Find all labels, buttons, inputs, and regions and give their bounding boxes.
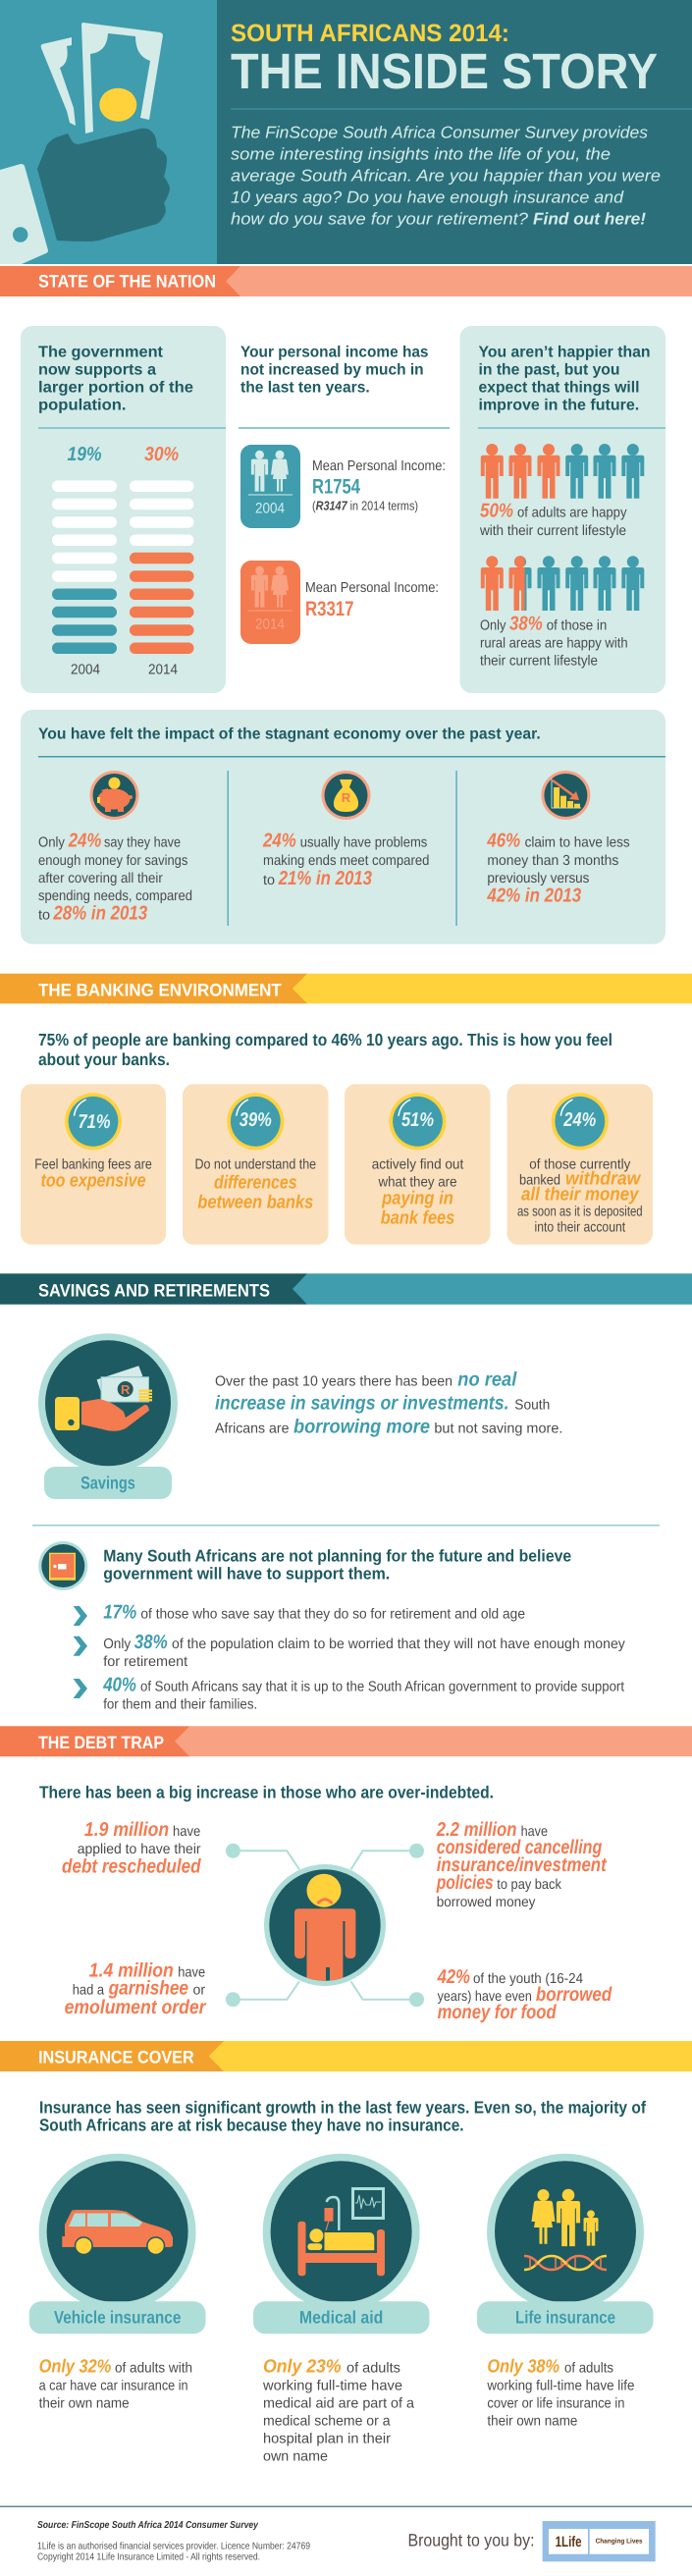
icon: open hand <box>81 1399 149 1431</box>
heading: now supports a <box>38 361 156 378</box>
icon: piggy bank <box>90 771 139 820</box>
callout: debt rescheduled: 1.9 million <box>84 1819 169 1841</box>
text: ends meet <box>262 831 430 889</box>
callout: borrowed money for food: money for food <box>438 2002 557 2023</box>
icon: safe <box>38 1541 87 1590</box>
badge 24 percent <box>552 1093 609 1150</box>
text: 50 percent: of adults are happy <box>517 506 627 521</box>
badge 24 percent: 24% <box>562 1109 596 1131</box>
card text: differences <box>214 1173 297 1194</box>
card text: Do not understand the <box>194 1156 316 1172</box>
text: less money: money than 3 months <box>487 853 618 869</box>
19 percent label: 19% <box>67 444 102 465</box>
text: ends meet: 21% in 2013 <box>278 868 372 889</box>
icon: hospital circle <box>263 2154 420 2311</box>
label: medical aid: Medical aid <box>299 2308 383 2328</box>
bar chart: 2004 <box>52 481 117 654</box>
text: life insurance stat: Only 38% <box>487 2357 559 2378</box>
savings text <box>215 1368 562 1438</box>
icon: money bag <box>322 771 371 820</box>
callout: borrowed money for food: borrowed <box>536 1984 612 2006</box>
bullet: 17 percent: 17% <box>103 1601 136 1623</box>
card text: bank fees <box>381 1208 454 1229</box>
section banner: insurance cover: INSURANCE COVER <box>38 2048 194 2067</box>
callout: garnishee: had a <box>73 1982 105 1998</box>
footer: source and legal: Copyright 2014 1Life Insurance Limited - All rights reserved. <box>37 2551 260 2562</box>
text: medical aid stat: working full-time have <box>262 2379 402 2394</box>
text: 38 percent <box>480 613 628 669</box>
text: savings: say they have <box>104 835 181 851</box>
icon: family <box>532 2189 598 2246</box>
30 percent label: 30% <box>144 444 179 465</box>
text: 38 percent: their current lifestyle <box>480 653 598 669</box>
heading <box>38 344 193 413</box>
callout: borrowed money for food: 42% <box>437 1966 470 1988</box>
callout: borrowed money for food: of the youth (16-24 <box>473 1971 583 1987</box>
callout: cancelling insurance: 2.2 million <box>436 1819 516 1841</box>
intro paragraph: some interesting insights into the life of you, the <box>231 145 611 164</box>
section banner: debt trap: THE DEBT TRAP <box>38 1733 164 1752</box>
text: life insurance stat: their own name <box>487 2414 577 2430</box>
card text: paying in <box>381 1189 453 1209</box>
text: medical aid stat: hospital plan in their <box>263 2432 391 2447</box>
income text 2004: Mean Personal Income: <box>312 458 446 474</box>
pictogram: 38 percent rural <box>481 556 644 611</box>
text: less money <box>487 831 630 907</box>
callout: debt rescheduled <box>62 1819 201 1877</box>
text: vehicle insurance stat: of adults with <box>115 2361 192 2377</box>
heading: expect that things will <box>479 379 640 396</box>
footer: 1Life logo: Changing Lives <box>596 2538 643 2546</box>
callout: cancelling insurance: considered cancelling <box>437 1837 602 1858</box>
callout: debt rescheduled: applied to have their <box>78 1842 201 1857</box>
header panel: title and intro <box>217 0 692 264</box>
icon: sad person <box>264 1864 386 1993</box>
callout: cancelling insurance: insurance/investment <box>437 1854 608 1876</box>
text: less money: previously versus <box>487 871 589 886</box>
heading: You have felt the impact of the stagnant economy over the past year. <box>38 725 541 742</box>
bullet: 40 percent <box>74 1674 624 1712</box>
footer: source and legal: 1Life is an authorised financial services provider. Licence Number: 24769 <box>37 2542 310 2552</box>
savings text: South <box>514 1397 550 1413</box>
retirement heading: Many South Africans are not planning for the future and believe <box>103 1547 571 1566</box>
bar chart: 2014 <box>130 481 194 654</box>
badge 71 percent: 71% <box>79 1111 111 1133</box>
badge 39 percent <box>227 1093 284 1150</box>
text: medical aid stat: Only 23% <box>263 2357 342 2378</box>
pictogram: 50 percent happy <box>481 444 644 499</box>
text: medical aid stat: medical scheme or a <box>263 2414 391 2430</box>
text: savings: enough money for savings <box>38 853 187 869</box>
icon: sleeve <box>55 1397 80 1430</box>
debt heading: There has been a big increase in those who are over-indebted. <box>39 1783 494 1802</box>
card text: as soon as it is deposited <box>517 1205 643 1220</box>
text: 50 percent <box>479 501 627 539</box>
card text <box>194 1156 316 1213</box>
heading: You aren’t happier than <box>479 344 650 360</box>
section banner: debt trap <box>0 1726 692 1756</box>
bullet: 38 percent: Only <box>103 1637 132 1652</box>
text: life insurance stat <box>486 2357 634 2430</box>
icon: dna helix <box>524 2256 607 2270</box>
income tile 2014 <box>240 561 300 644</box>
text: medical aid stat: medical aid are part of a <box>263 2396 415 2412</box>
card: withdraw all their money <box>507 1084 653 1245</box>
section banner: banking environment: THE BANKING ENVIRONMENT <box>38 981 282 1000</box>
savings text: no real <box>457 1368 517 1390</box>
banking heading <box>38 1030 612 1069</box>
card text: Feel banking fees are <box>34 1156 152 1172</box>
text: savings: to <box>38 908 50 924</box>
card text: all their money <box>521 1185 640 1206</box>
income tile 2004: 2004 <box>255 501 285 517</box>
text: 38 percent: rural areas are happy with <box>480 635 628 651</box>
insurance heading: South Africans are at risk because they have no insurance. <box>39 2115 464 2134</box>
bullet: 38 percent: 38% <box>134 1632 168 1653</box>
text: ends meet: making ends meet compared <box>263 853 430 869</box>
text: life insurance stat: working full-time have life <box>486 2379 634 2394</box>
heading: the last ten years. <box>240 379 370 396</box>
section banner: savings and retirements <box>0 1273 692 1305</box>
intro paragraph <box>231 124 661 229</box>
bullet: 17 percent <box>74 1601 525 1626</box>
callout: borrowed money for food: years) have even <box>438 1989 532 2005</box>
header panel: illustration <box>0 0 217 264</box>
bullet: 17 percent: of those who save say that they do so for retirement and old age <box>140 1606 525 1622</box>
text: vehicle insurance stat <box>39 2357 192 2412</box>
callout: debt rescheduled: have <box>173 1824 200 1840</box>
card text <box>517 1156 643 1236</box>
label: medical aid <box>253 2301 430 2334</box>
income text 2014 <box>305 580 439 620</box>
text: ends meet: to <box>263 873 275 888</box>
text: medical aid stat: of adults <box>346 2361 400 2377</box>
footer: source and legal: Source: FinScope South Africa 2014 Consumer Survey <box>37 2520 258 2531</box>
intro paragraph: The FinScope South Africa Consumer Survey provides <box>231 124 649 142</box>
heading: not increased by much in <box>240 361 424 378</box>
savings text: increase in savings or investments. <box>215 1392 508 1414</box>
bullet: 38 percent <box>74 1632 626 1670</box>
callout: borrowed money for food <box>437 1966 612 2023</box>
icon: fist <box>37 129 170 242</box>
text: less money: 46% <box>487 831 520 852</box>
intro paragraph: 10 years ago? Do you have enough insurance and <box>231 188 624 207</box>
income tile 2014: 2014 <box>255 617 285 633</box>
text: medical aid stat: own name <box>263 2449 328 2465</box>
callout: cancelling insurance: have <box>521 1824 548 1840</box>
callout: cancelling insurance <box>436 1819 608 1910</box>
retirement heading <box>103 1547 571 1583</box>
icon: small banknote <box>41 37 76 126</box>
card: banking fees <box>21 1084 166 1245</box>
bullet: 40 percent: of South Africans say that it is up to the South African government to provide support <box>140 1679 624 1694</box>
callout: garnishee: have <box>178 1964 205 1980</box>
label: life insurance: Life insurance <box>515 2308 615 2328</box>
text: 50 percent: with their current lifestyle <box>479 523 626 539</box>
section banner: banking environment <box>0 974 692 1003</box>
income text 2014: Mean Personal Income: <box>305 580 439 596</box>
callout: cancelling insurance: policies <box>436 1872 494 1894</box>
banking heading: about your banks. <box>38 1049 170 1069</box>
savings text: borrowing more <box>293 1417 430 1438</box>
card text: what they are <box>378 1174 457 1190</box>
icon: car circle <box>39 2154 196 2311</box>
badge 51 percent: 51% <box>401 1109 434 1131</box>
icon: large banknote <box>81 23 163 134</box>
title line one: SOUTH AFRICANS 2014: <box>231 20 509 47</box>
icon: savings circle <box>38 1333 178 1473</box>
intro paragraph: how do you save for your retirement? <box>231 210 529 229</box>
panel: government support <box>21 326 226 693</box>
section banner: insurance cover <box>0 2041 692 2071</box>
text: life insurance stat: of adults <box>564 2361 613 2377</box>
heading: in the past, but you <box>479 361 620 378</box>
text: life insurance stat: cover or life insurance in <box>487 2396 624 2412</box>
callout: garnishee: or <box>192 1982 205 1998</box>
text: savings: 24% <box>68 831 102 852</box>
section banner: state of the nation <box>0 266 692 296</box>
heading: population. <box>38 397 126 413</box>
panel: personal income <box>239 344 450 644</box>
card text: too expensive <box>41 1170 146 1191</box>
income text 2004: R1754 <box>312 476 360 499</box>
text: 38 percent: of those in <box>547 617 607 633</box>
panel: happiness <box>459 326 665 693</box>
heading <box>240 344 429 396</box>
bullet: 40 percent: 40% <box>102 1674 136 1695</box>
callout: garnishee: emolument order <box>65 1997 207 2018</box>
heading <box>479 344 650 413</box>
icon: money bag: R <box>342 790 351 805</box>
text: vehicle insurance stat: their own name <box>39 2396 130 2412</box>
retirement heading: government will have to support them. <box>103 1565 390 1583</box>
icon: heart monitor <box>353 2189 383 2219</box>
connectors <box>226 1844 424 2007</box>
callout: debt rescheduled: debt rescheduled <box>62 1855 201 1877</box>
icon: banknotes <box>96 1366 149 1402</box>
income text 2004 <box>312 458 446 512</box>
section banner: state of the nation: STATE OF THE NATION <box>38 272 216 292</box>
heading: The government <box>38 344 164 360</box>
savings text: but not saving more. <box>434 1422 562 1437</box>
text: vehicle insurance stat: Only 32% <box>39 2357 111 2378</box>
title line two: THE INSIDE STORY <box>231 43 658 99</box>
callout: cancelling insurance: to pay back <box>497 1877 562 1893</box>
card text: withdraw <box>565 1169 642 1190</box>
icon: bed and patient <box>298 2222 385 2276</box>
panel: stagnant economy <box>21 710 665 944</box>
text: 50 percent: 50% <box>480 501 513 522</box>
insurance heading <box>39 2097 646 2134</box>
card text <box>34 1156 152 1191</box>
callout: cancelling insurance: borrowed money <box>437 1895 536 1910</box>
text: savings: spending needs, compared <box>38 888 192 904</box>
footer: source and legal <box>37 2520 310 2562</box>
heading: larger portion of the <box>38 379 193 396</box>
bullet: 40 percent: for them and their families. <box>103 1696 257 1712</box>
savings text: Africans are <box>215 1422 289 1437</box>
heading: Your personal income has <box>240 344 429 360</box>
footer: 1Life logo: 1Life <box>556 2534 582 2550</box>
income text 2014: R3317 <box>305 598 353 620</box>
intro paragraph: average South African. Are you happier than you were <box>231 167 661 186</box>
heading: improve in the future. <box>479 397 639 413</box>
label: vehicle insurance <box>29 2301 206 2334</box>
icon: family circle <box>487 2154 644 2311</box>
bullet: 38 percent: for retirement <box>103 1654 187 1670</box>
card text: of those currently <box>529 1156 631 1172</box>
axis label 2004: 2004 <box>71 663 100 678</box>
label: vehicle insurance: Vehicle insurance <box>54 2308 181 2328</box>
text: 38 percent: 38% <box>509 613 543 634</box>
icon: falling chart <box>541 771 590 820</box>
icon: shirt cuff <box>0 164 48 264</box>
callout: garnishee: garnishee <box>108 1977 188 1999</box>
text: savings: 28% in 2013 <box>53 903 147 925</box>
label: life insurance <box>477 2301 654 2334</box>
text: vehicle insurance stat: a car have car insurance in <box>39 2379 188 2394</box>
income text 2004: (R3147 in 2014 terms) <box>312 498 418 512</box>
text: 38 percent: Only <box>480 617 506 633</box>
card text: banked <box>519 1173 560 1189</box>
section banner: savings and retirements: SAVINGS AND RETIREMENTS <box>38 1280 270 1300</box>
icon: coins <box>139 1390 152 1401</box>
text: medical aid stat <box>262 2357 415 2465</box>
footer: 1Life logo <box>543 2521 656 2561</box>
footer: brought to you by: Brought to you by: <box>408 2530 534 2549</box>
callout: garnishee <box>65 1959 207 2018</box>
icon: car <box>62 2210 173 2255</box>
badge 39 percent: 39% <box>240 1109 272 1131</box>
card text: between banks <box>197 1193 313 1213</box>
text: savings <box>38 831 192 925</box>
savings text: Over the past 10 years there has been <box>215 1373 452 1389</box>
text: less money: 42% in 2013 <box>487 886 581 907</box>
card: paying in bank fees <box>345 1084 491 1245</box>
card text: actively find out <box>372 1156 463 1172</box>
label: savings: Savings <box>80 1474 135 1493</box>
icon: gold coin <box>99 88 136 122</box>
axis label 2014: 2014 <box>148 663 178 678</box>
label: savings <box>44 1467 172 1499</box>
card text: into their account <box>534 1220 625 1236</box>
card text <box>372 1156 463 1229</box>
bullet: 38 percent: of the population claim to be worried that they will not have enough money <box>172 1637 626 1652</box>
text: ends meet: 24% <box>262 831 296 852</box>
badge 51 percent <box>389 1093 446 1150</box>
text: savings: Only <box>38 835 66 851</box>
income tile 2004 <box>240 445 300 528</box>
badge 71 percent <box>65 1093 122 1150</box>
text: savings: after covering all their <box>38 871 163 886</box>
banking heading: 75% of people are banking compared to 46% 10 years ago. This is how you feel <box>38 1030 612 1049</box>
text: less money: claim to have less <box>525 835 630 851</box>
icon: banknotes: R <box>121 1382 131 1397</box>
text: ends meet: usually have problems <box>300 835 427 851</box>
icon: drip <box>324 2197 339 2230</box>
callout: garnishee: 1.4 million <box>89 1959 174 1981</box>
card: differences between banks <box>183 1084 328 1245</box>
intro paragraph: Find out here! <box>533 210 646 229</box>
